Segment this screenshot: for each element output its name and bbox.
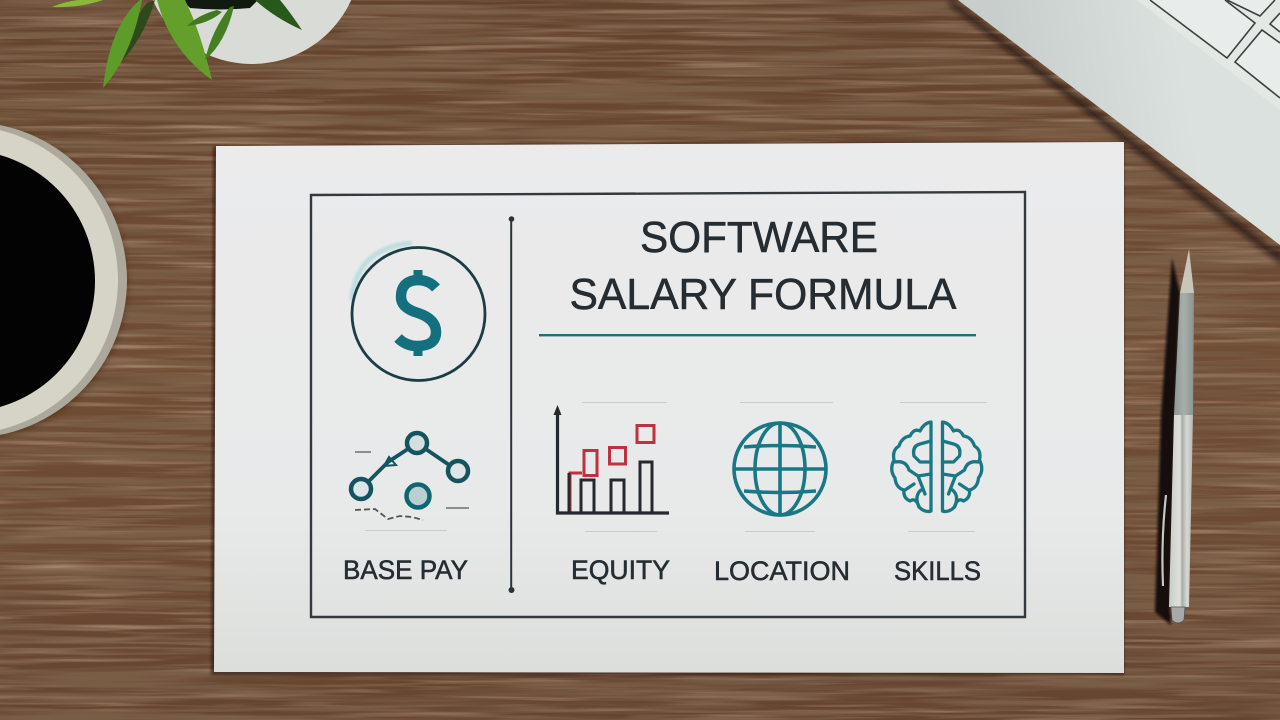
title: SALARY FORMULA (570, 270, 957, 319)
title underline (539, 334, 976, 336)
paper sheet (211, 142, 1124, 675)
plant pot with leaves (52, 0, 361, 88)
label: location: LOCATION (714, 556, 850, 586)
faint rules around icons (365, 402, 987, 532)
inner frame (311, 192, 1025, 617)
icon: equity bar chart (554, 405, 669, 513)
icon: dollar coin (352, 243, 485, 380)
title (570, 213, 957, 319)
vertical divider (508, 216, 514, 593)
label: skills: SKILLS (894, 556, 981, 586)
icon: base pay network (351, 433, 469, 520)
pen (1155, 249, 1194, 625)
laptop corner with keys (950, 0, 1280, 260)
icon: skills brain (892, 422, 982, 512)
label: equity: EQUITY (571, 555, 670, 585)
icon: location globe (734, 423, 826, 515)
title: SOFTWARE (640, 213, 878, 262)
coffee mug (0, 122, 128, 440)
label: base pay: BASE PAY (343, 555, 468, 585)
